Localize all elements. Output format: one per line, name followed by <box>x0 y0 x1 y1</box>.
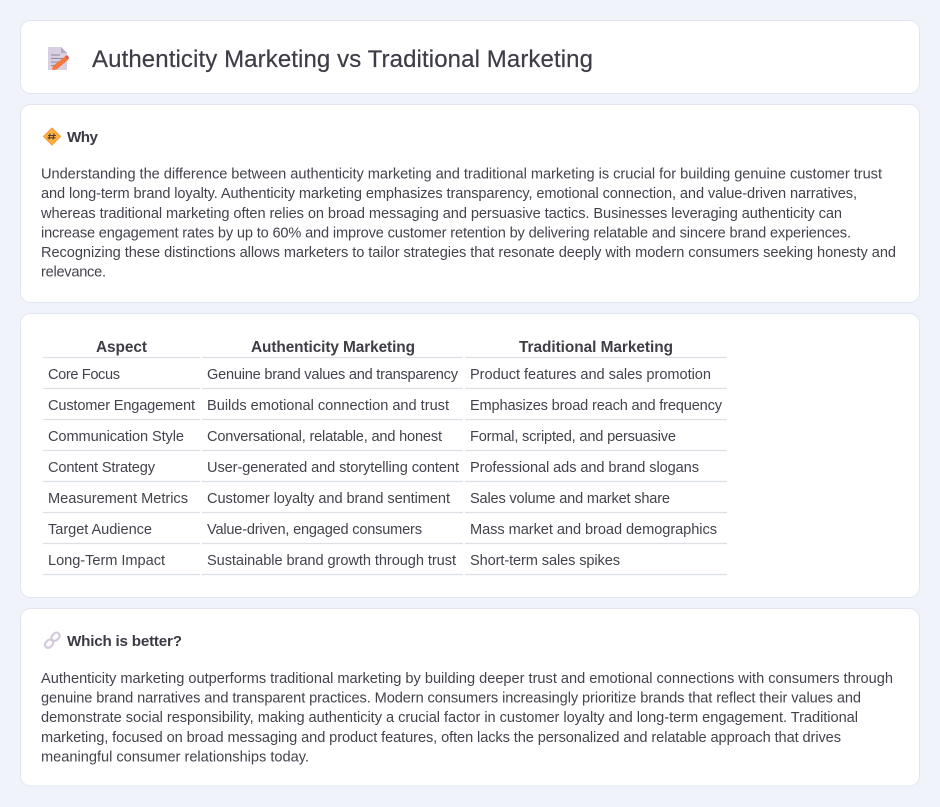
title: Authenticity Marketing vs Traditional Marketing <box>92 46 593 73</box>
heading: why: Why <box>67 129 99 146</box>
row: customer engagement: Builds emotional connection and trust <box>207 398 449 414</box>
icon: orange diamond <box>44 128 60 145</box>
text block: which is better paragraph: meaningful consumer relationships today. <box>41 749 309 765</box>
row: customer engagement <box>48 398 723 414</box>
panel: which is better <box>20 608 920 786</box>
row: target audience: Value-driven, engaged consumers <box>207 522 422 538</box>
text block: why paragraph: and long-term brand loyalty. Authenticity marketing emphasizes transparency, emotional connection, and value-driven narratives, <box>41 186 857 202</box>
row: content strategy: User-generated and storytelling content <box>207 460 459 476</box>
row: long-term impact: Sustainable brand growth through trust <box>207 553 456 569</box>
row: measurement metrics <box>48 491 670 507</box>
row: long-term impact: Long-Term Impact <box>48 553 165 569</box>
panel: comparison table <box>20 314 920 598</box>
row: target audience <box>48 522 717 538</box>
row: communication style: Conversational, relatable, and honest <box>207 429 442 445</box>
row: measurement metrics: Sales volume and market share <box>470 491 670 507</box>
table header <box>96 339 673 356</box>
icon: memo with pencil <box>48 47 69 70</box>
row: measurement metrics: Measurement Metrics <box>48 491 188 507</box>
table header: Traditional Marketing <box>519 339 673 356</box>
table header: Authenticity Marketing <box>251 339 415 356</box>
row: core focus: Genuine brand values and transparency <box>207 367 459 383</box>
table header: Aspect <box>96 339 147 356</box>
text block: why paragraph: whereas traditional marketing often relies on broad messaging and persuasive tactics. Businesses leveraging authenticity can <box>40 206 842 222</box>
panel: why <box>20 104 920 302</box>
text block: why paragraph: Recognizing these distinctions allows marketers to tailor strategies that resonate deeply with modern consumers seeking honesty and <box>41 245 896 261</box>
text block: why paragraph: increase engagement rates by up to 60% and improve customer retention by delivering relatable and sincere brand experiences. <box>41 225 851 241</box>
text block: why paragraph: Understanding the difference between authenticity marketing and traditional marketing is crucial for building genuine customer trust <box>41 167 882 183</box>
text block: which is better paragraph: genuine brand narratives and transparent practices. Modern consumers increasingly prioritize brands that reflect their values and <box>41 691 861 707</box>
row: long-term impact: Short-term sales spikes <box>470 553 620 569</box>
row: target audience: Target Audience <box>48 522 152 538</box>
text block: which is better paragraph: Authenticity marketing outperforms traditional marketing by building deeper trust and emotional connections with consumers through <box>41 671 893 687</box>
row: core focus: Product features and sales promotion <box>470 367 711 383</box>
row: content strategy <box>48 460 699 476</box>
row: communication style: Formal, scripted, and persuasive <box>470 429 676 445</box>
row: measurement metrics: Customer loyalty and brand sentiment <box>207 491 450 507</box>
text block: which is better paragraph <box>41 671 893 765</box>
heading: which is better: Which is better? <box>67 633 182 650</box>
row: customer engagement: Emphasizes broad reach and frequency <box>470 398 723 414</box>
row: content strategy: Content Strategy <box>48 460 156 476</box>
panel: header <box>20 20 920 94</box>
row: communication style <box>48 429 676 445</box>
row: core focus <box>48 367 711 383</box>
row: long-term impact <box>48 553 620 569</box>
icon: link <box>44 631 61 649</box>
row: core focus: Core Focus <box>48 367 120 383</box>
row: content strategy: Professional ads and brand slogans <box>470 460 699 476</box>
row: target audience: Mass market and broad demographics <box>470 522 717 538</box>
row: customer engagement: Customer Engagement <box>48 398 195 414</box>
text block: which is better paragraph: demonstrate social responsibility, making authenticity a crucial factor in customer loyalty and long-term engagement. Traditional <box>41 710 858 726</box>
text block: why paragraph <box>40 167 896 281</box>
text block: which is better paragraph: marketing, focused on broad messaging and product features, often lacks the personalized and relatable approach that drives <box>41 730 841 746</box>
text block: why paragraph: relevance. <box>41 265 106 281</box>
row: communication style: Communication Style <box>48 429 184 445</box>
